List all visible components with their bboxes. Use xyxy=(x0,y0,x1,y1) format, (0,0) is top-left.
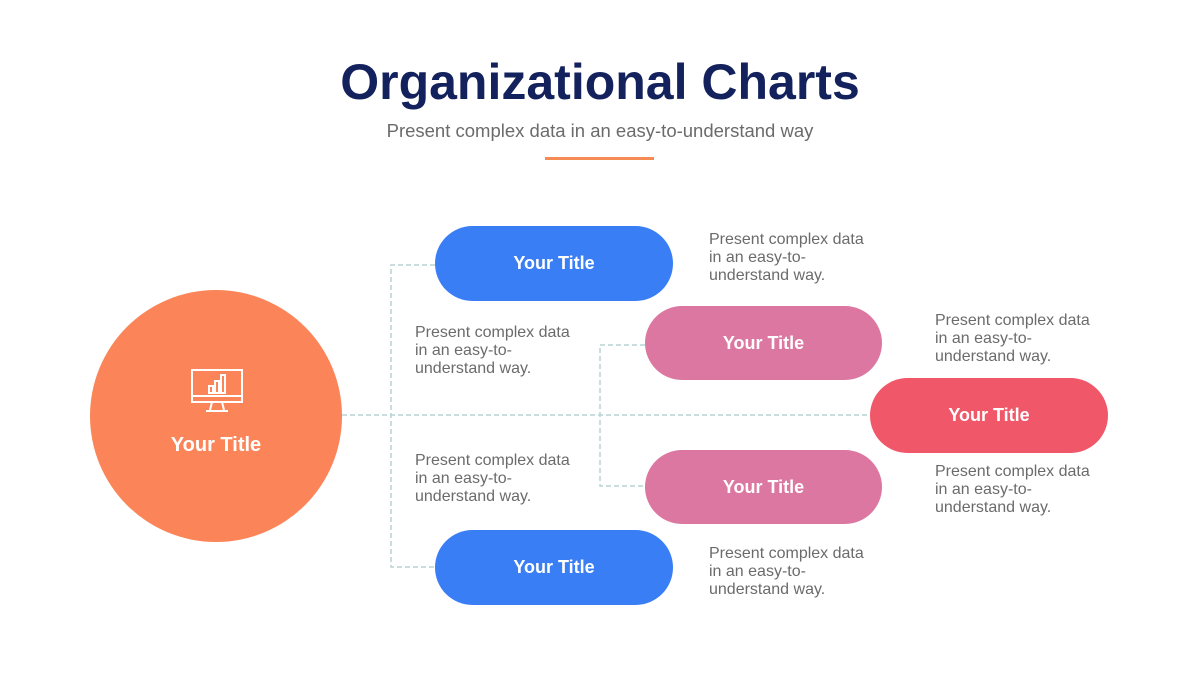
text: right lower: Present complex data xyxy=(935,463,1090,480)
text: blue top: in an easy-to- xyxy=(709,249,806,266)
text: left lower: in an easy-to- xyxy=(415,470,512,487)
text: blue top: Present complex data xyxy=(709,231,864,248)
text: blue bottom: understand way. xyxy=(709,581,825,598)
pill: pink bottom xyxy=(645,450,882,524)
text: left lower xyxy=(415,452,570,505)
text: blue bottom: Present complex data xyxy=(709,545,864,562)
pill: pink bottom: Your Title xyxy=(723,476,804,496)
pill: pink top: Your Title xyxy=(723,332,804,352)
text: left upper xyxy=(415,324,570,377)
accent line xyxy=(545,157,654,160)
text: right lower: understand way. xyxy=(935,499,1051,516)
text: left lower: understand way. xyxy=(415,488,531,505)
text: blue bottom xyxy=(709,545,864,598)
text: left lower: Present complex data xyxy=(415,452,570,469)
text: right upper: Present complex data xyxy=(935,312,1090,329)
pill: blue top xyxy=(435,226,673,301)
text: right lower xyxy=(935,463,1090,516)
text: left upper: Present complex data xyxy=(415,324,570,341)
text: right upper: in an easy-to- xyxy=(935,330,1032,347)
pill: blue bottom xyxy=(435,530,673,605)
text: blue top xyxy=(709,231,864,284)
text: left upper: understand way. xyxy=(415,360,531,377)
circle: main node xyxy=(90,290,342,542)
circle title: Your Title xyxy=(171,434,261,456)
text: left upper: in an easy-to- xyxy=(415,342,512,359)
text: right upper xyxy=(935,312,1090,365)
subtitle: Present complex data in an easy-to-understand way xyxy=(387,120,813,141)
text: right lower: in an easy-to- xyxy=(935,481,1032,498)
pill: red: Your Title xyxy=(948,405,1030,425)
text: right upper: understand way. xyxy=(935,348,1051,365)
icon: monitor chart xyxy=(191,369,243,412)
pill: pink top xyxy=(645,306,882,380)
text: blue bottom: in an easy-to- xyxy=(709,563,806,580)
pill: blue top: Your Title xyxy=(513,253,595,273)
text: blue top: understand way. xyxy=(709,267,825,284)
pill: blue bottom: Your Title xyxy=(513,557,595,577)
pill: red xyxy=(870,378,1108,453)
title: Organizational Charts xyxy=(340,54,860,110)
